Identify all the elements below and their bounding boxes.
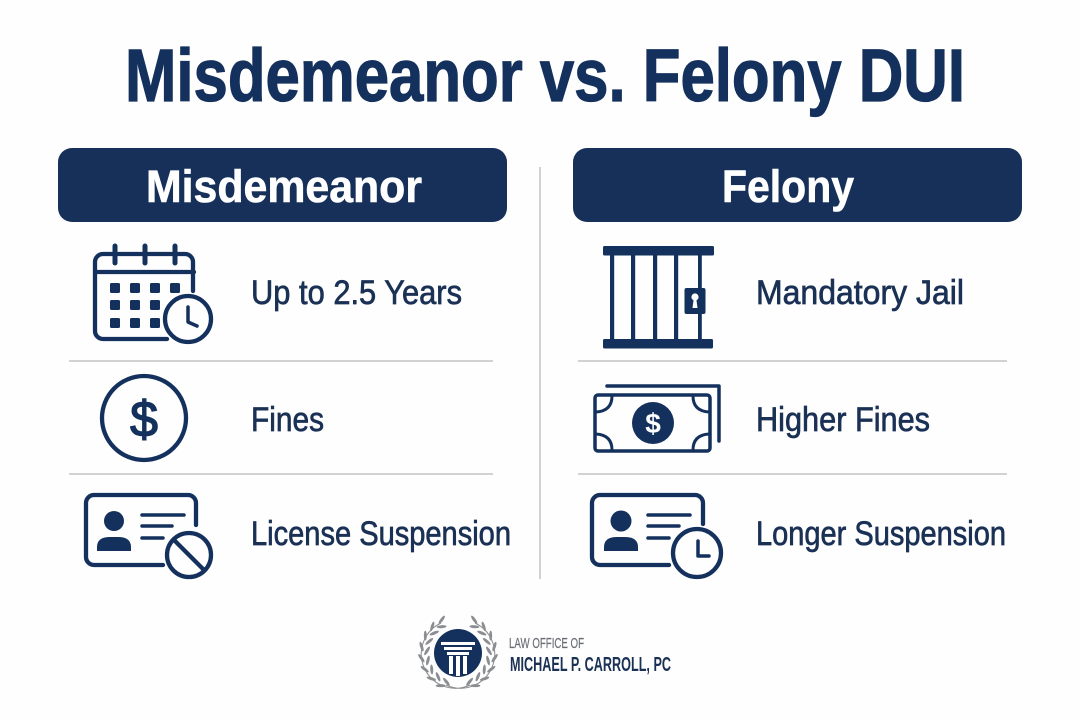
panel: felony [573, 148, 1022, 577]
logo: law office of michael p. carroll [417, 615, 671, 688]
icon: jail bars with lock [603, 246, 714, 348]
text: higher fines: Higher Fines [756, 401, 930, 439]
text: mandatory jail: Mandatory Jail [756, 274, 964, 312]
icon: license with prohibition sign [86, 495, 211, 577]
text: longer suspension: Longer Suspension [756, 515, 1006, 553]
icon: laurel wreath and column [417, 615, 499, 688]
icon: calendar with clock [95, 246, 211, 342]
heading: misdemeanor [58, 148, 507, 222]
icon: dollar coin: $ [130, 391, 158, 447]
panel: misdemeanor [58, 148, 511, 577]
heading: felony [573, 148, 1022, 222]
text: license suspension: License Suspension [251, 515, 511, 553]
heading: misdemeanor: Misdemeanor [146, 161, 422, 212]
icon: banknotes: $ [645, 408, 661, 439]
icon: license with clock [592, 495, 721, 577]
icon: banknotes [595, 386, 719, 451]
text: up to 2.5 years: Up to 2.5 Years [251, 274, 462, 312]
icon: dollar coin [102, 376, 186, 460]
text: michael p. carroll, pc: MICHAEL P. CARROLL, PC [510, 654, 671, 676]
heading: felony: Felony [722, 161, 854, 212]
text: fines: Fines [251, 401, 324, 439]
text: law office of: LAW OFFICE OF [509, 635, 584, 652]
